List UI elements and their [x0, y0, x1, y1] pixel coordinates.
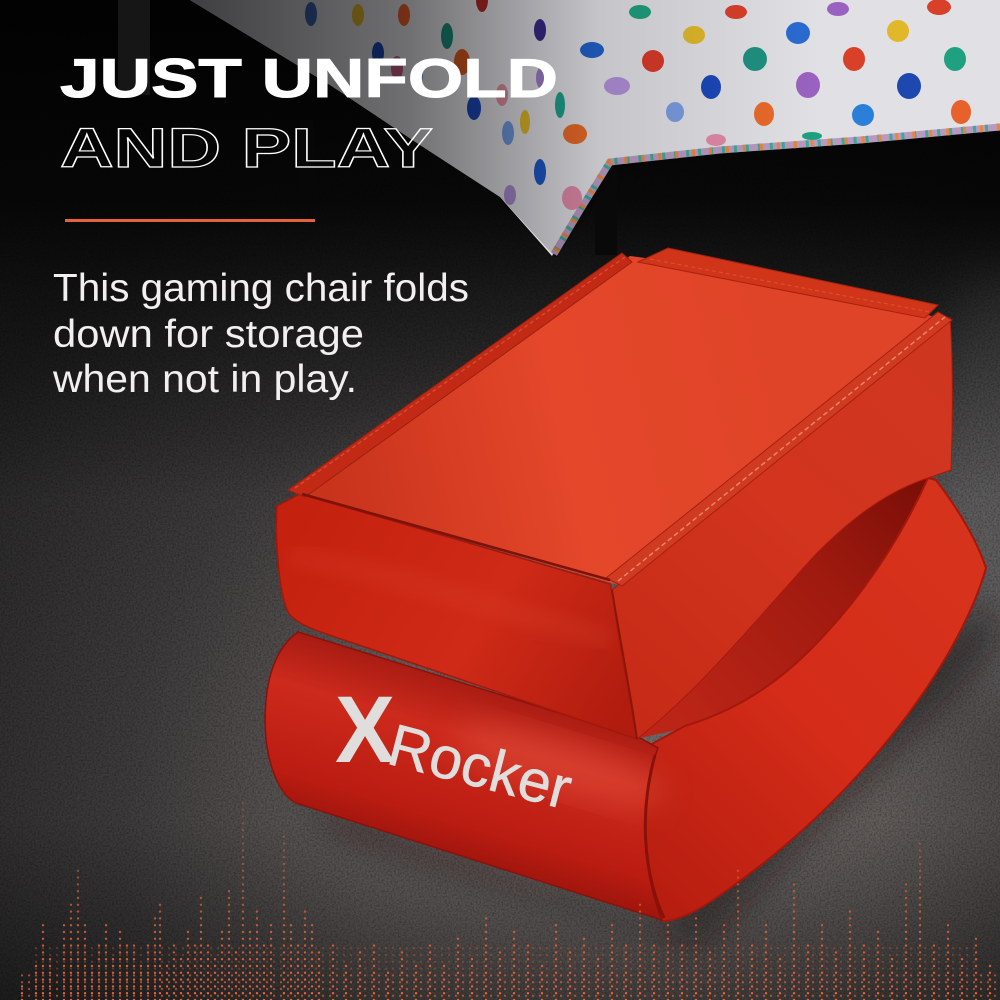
floor shadow under chair: [300, 600, 1000, 945]
inner arch: [640, 470, 930, 738]
rocker side panel: [643, 478, 986, 921]
description text: when not in play.: [52, 358, 357, 401]
front roll of base: [265, 632, 662, 920]
bed legs: [118, 0, 617, 255]
logo: XRocker: X: [335, 677, 395, 783]
folded red gaming chair: [265, 248, 986, 921]
logo: XRocker: [335, 677, 578, 822]
polka dots: [305, 0, 971, 210]
title line 2: outlined: AND PLAY: [60, 116, 433, 179]
upper block: top face: [296, 256, 932, 584]
title line 1: filled: JUST UNFOLD: [60, 47, 558, 109]
upper block: front face: [276, 494, 637, 739]
orange divider: [65, 219, 315, 222]
upper block: right face: [612, 318, 952, 739]
halftone dots at bottom: [18, 800, 1000, 1000]
bedding with polka dots: [190, 0, 1000, 258]
logo: XRocker: Rocker: [382, 712, 578, 822]
description text: down for storage: [53, 313, 364, 356]
striped fringe: [554, 127, 1000, 254]
description text: [52, 267, 469, 401]
description text: This gaming chair folds: [53, 267, 469, 310]
top seams: [288, 253, 632, 497]
title: [60, 47, 558, 179]
